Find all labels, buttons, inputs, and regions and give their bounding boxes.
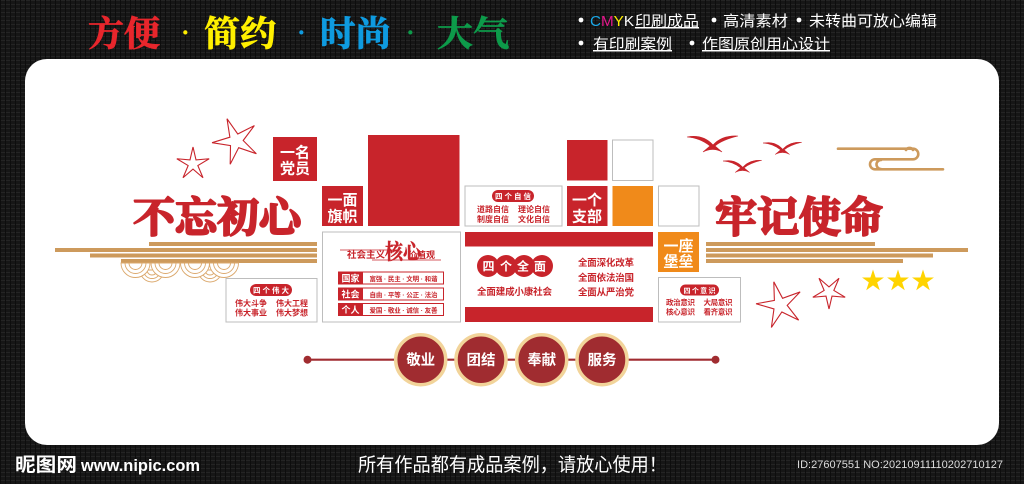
panel: 四个伟大: 四个伟大: [253, 285, 290, 295]
values heading: [340, 240, 441, 264]
node: 服务: 服务: [588, 351, 617, 369]
panel: 四个自信: 文化自信: [518, 214, 550, 224]
panel: 四个全面: 全面从严治党: [578, 286, 634, 298]
row: 国家: 富强 · 民主 · 文明 · 和谐: [370, 274, 438, 283]
feature list: 未转曲可放心编辑: [809, 13, 937, 30]
feature list: 印刷成品: [635, 13, 699, 30]
panel: 四个意识: 看齐意识: [704, 306, 733, 316]
panel: 四个全面: 全面深化改革: [578, 257, 634, 269]
panel: 四个意识: 政治意识: [666, 297, 696, 307]
row: 社会: 自由 · 平等 · 公正 · 法治: [370, 290, 438, 299]
block: 一座堡垒: 堡垒: [663, 252, 694, 270]
panel: 四个伟大: 伟大事业: [235, 308, 267, 318]
badge: 四个全面: 全: [517, 258, 529, 274]
panel: 四个意识: [658, 278, 740, 322]
block: 一名党员: 党员: [280, 160, 310, 178]
feature list: 高清素材: [723, 13, 788, 30]
slogan heading: [88, 15, 509, 54]
icon: flying birds: [687, 136, 802, 172]
node: 敬业: 敬业: [406, 352, 435, 369]
block: red tile: [567, 140, 608, 180]
node: 团结: 团结: [466, 351, 496, 369]
panel: 四个自信: [465, 186, 562, 226]
feature list: CMYK: [590, 13, 634, 30]
slogan heading: ·: [406, 18, 415, 47]
row: 个人: 个人: [341, 305, 360, 315]
block: 一座堡垒: [658, 232, 699, 272]
row: 社会: [338, 288, 444, 300]
icon: wave pattern: [121, 263, 238, 282]
wood lines right: [706, 242, 968, 263]
block: 一个支部: 支部: [572, 208, 602, 226]
timeline: four values: [304, 335, 720, 385]
panel: 四个全面: 全面依法治国: [578, 272, 634, 284]
heading: 牢记使命: 牢记使命: [715, 195, 883, 242]
feature list: 作图原创用心设计: [702, 36, 830, 53]
icon: outline stars left: [177, 110, 264, 178]
block: 一个支部: 一个: [572, 192, 602, 209]
block: 一面旗帜: 旗帜: [327, 208, 358, 226]
panel: 四个伟大: 伟大梦想: [276, 308, 308, 318]
values heading: 核心: [385, 240, 424, 264]
panel: 四个全面: 全面建成小康社会: [477, 286, 552, 298]
block: orange tile: [612, 186, 653, 226]
icon: auspicious cloud: [838, 148, 943, 169]
watermark: site logo: [15, 454, 200, 476]
slogan heading: 方便: [88, 15, 160, 54]
block: 一个支部: [567, 186, 608, 226]
node: 敬业: [396, 335, 446, 385]
panel: 四个自信: 四个自信: [495, 191, 532, 201]
image id: ID:27607551 NO:20210911110202710127: [797, 459, 1003, 471]
node: 服务: [577, 335, 627, 385]
panel: 四个意识: 核心意识: [666, 306, 696, 316]
row: 国家: [338, 272, 444, 284]
watermark: site logo: www.nipic.com: [80, 456, 200, 475]
feature list: [579, 13, 937, 53]
watermark: site logo: 昵图网: [15, 454, 77, 476]
panel: 四个意识: 大局意识: [704, 297, 733, 307]
badge: 四个全面: 个: [500, 260, 512, 274]
badge: 四个全面: 面: [534, 260, 546, 274]
slogan heading: ·: [181, 18, 190, 47]
values heading: 社会主义: [347, 249, 385, 261]
panel: 四个全面: [465, 232, 653, 322]
block: white tile right: [658, 186, 699, 226]
footer note: 所有作品都有成品案例，请放心使用！: [358, 454, 667, 476]
block: 一名党员: [273, 137, 317, 181]
panel: 四个自信: 道路自信: [477, 204, 509, 214]
block: large red photo panel: [368, 135, 460, 226]
slogan heading: 大气: [437, 15, 509, 54]
slogan heading: 简约: [204, 15, 276, 54]
panel: 四个伟大: 伟大工程: [276, 298, 308, 308]
panel: white culture wall: [25, 59, 999, 445]
row: 社会: 社会: [341, 288, 360, 300]
block: 一座堡垒: 一座: [663, 237, 694, 255]
node: 奉献: 奉献: [527, 351, 557, 369]
heading: 不忘初心: 不忘初心: [133, 195, 306, 242]
panel: 四个自信: 制度自信: [477, 214, 509, 224]
badge: 四个全面: [477, 255, 553, 277]
block: 一面旗帜: 一面: [327, 192, 358, 209]
slogan heading: ·: [297, 18, 306, 47]
panel: 四个自信: 理论自信: [518, 204, 550, 214]
badge: 四个全面: 四: [482, 260, 495, 274]
block: 一面旗帜: [322, 186, 363, 226]
row: 国家: 国家: [341, 272, 360, 284]
panel: 四个意识: 四个意识: [684, 286, 716, 295]
row: 个人: [338, 304, 444, 316]
block: 一名党员: 一名: [280, 144, 310, 162]
node: 团结: [456, 335, 506, 385]
panel: 四个伟大: [226, 278, 317, 322]
feature list: 有印刷案例: [593, 35, 672, 53]
block: white tile top: [612, 140, 653, 180]
slogan heading: 时尚: [320, 15, 391, 54]
values heading: 价值观: [408, 249, 435, 260]
panel: 四个伟大: 伟大斗争: [235, 298, 267, 308]
icon: gold stars: [862, 270, 934, 290]
row: 个人: 爱国 · 敬业 · 诚信 · 友善: [370, 306, 438, 314]
panel: 社会主义核心价值观: [322, 232, 460, 322]
icon: outline stars right: [752, 276, 845, 330]
node: 奉献: [517, 335, 567, 385]
wood lines left: [55, 242, 317, 263]
